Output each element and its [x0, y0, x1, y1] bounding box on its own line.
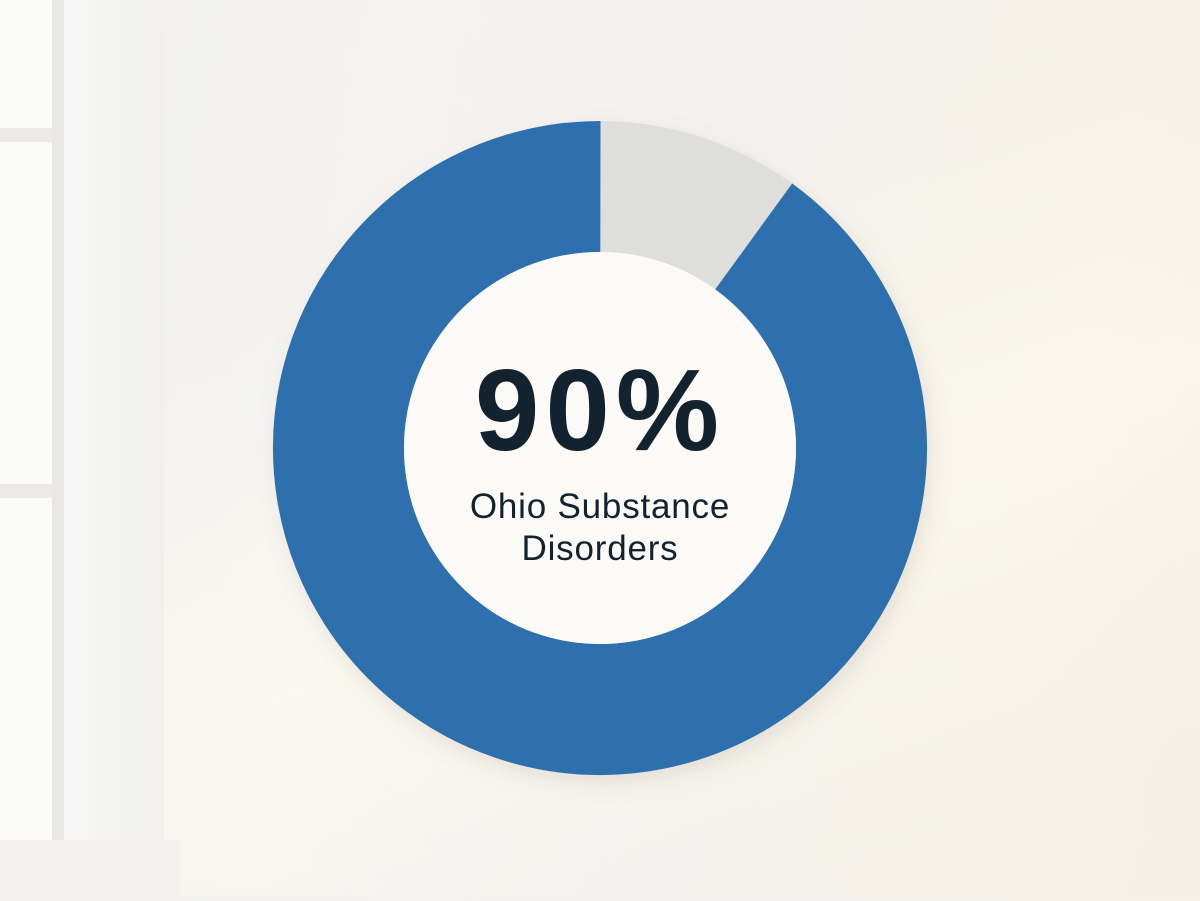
center label: Ohio Substance [470, 487, 730, 526]
window frame [0, 0, 164, 840]
center label: Disorders [522, 529, 678, 568]
center value: 90% [475, 345, 725, 475]
center label [470, 487, 730, 568]
